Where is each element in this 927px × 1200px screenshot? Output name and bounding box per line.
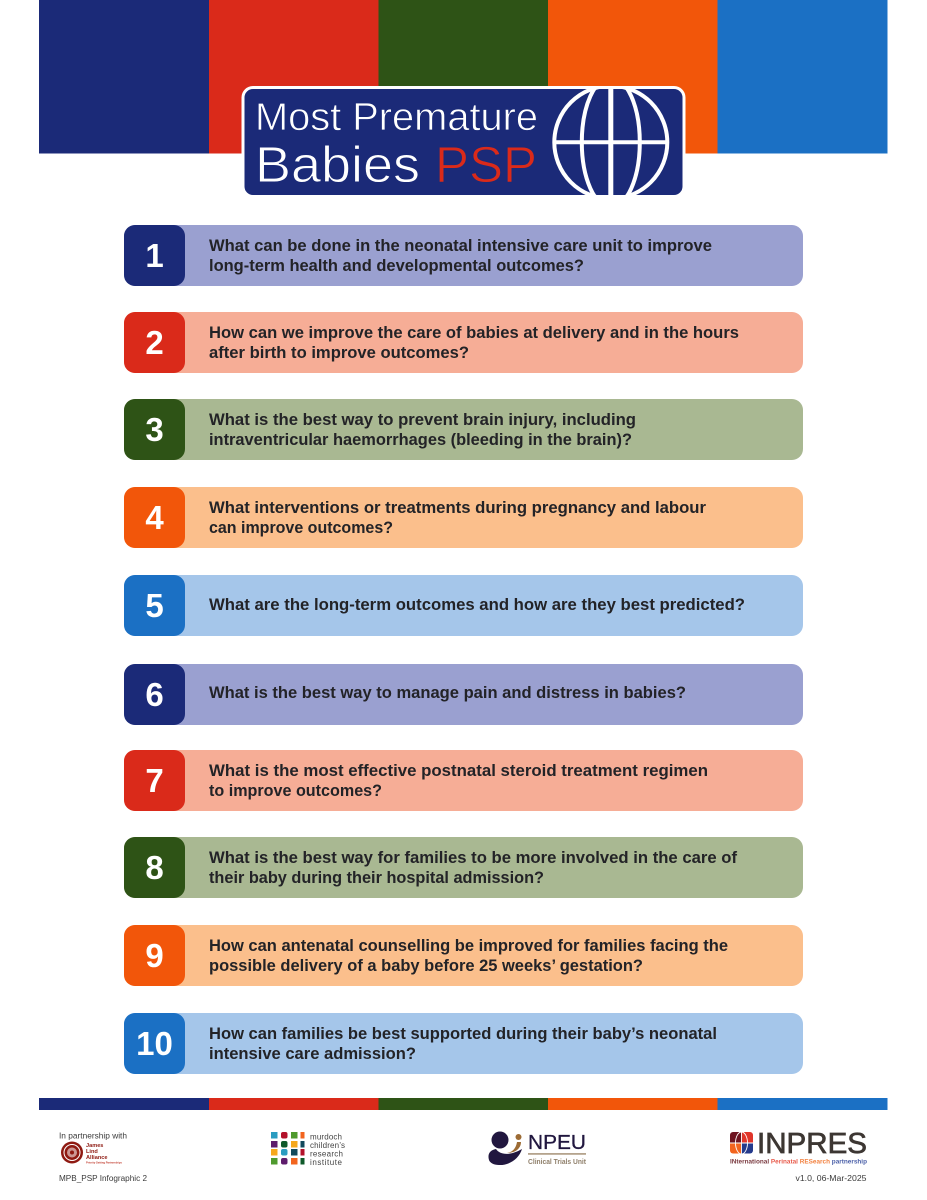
title: PSP: PSP xyxy=(435,136,537,193)
question 7: 7 xyxy=(145,762,164,799)
question 5: 5 xyxy=(145,587,164,624)
title panel xyxy=(242,86,686,195)
logo: James Lind Alliance: Alliance xyxy=(86,1155,107,1161)
logo: NPEU Clinical Trials Unit: Clinical Trials Unit xyxy=(528,1159,587,1166)
logo: James Lind Alliance: Priority Setting Partnerships xyxy=(86,1160,122,1164)
question 3 xyxy=(124,399,803,460)
question 2: after birth to improve outcomes? xyxy=(209,344,469,362)
question 4: What interventions or treatments during pregnancy and labour xyxy=(209,499,707,517)
question 7 xyxy=(124,750,803,811)
logo: NPEU Clinical Trials Unit: NPEU xyxy=(528,1132,586,1154)
question 2: 2 xyxy=(145,324,164,361)
question 8 xyxy=(124,837,803,898)
question 1: 1 xyxy=(145,237,164,274)
icon: globe xyxy=(552,89,670,195)
question 3: What is the best way to prevent brain injury, including xyxy=(209,411,636,429)
question 2: How can we improve the care of babies at delivery and in the hours xyxy=(209,324,739,342)
title: Most Premature: Most Premature xyxy=(255,96,538,139)
document reference: MPB_PSP Infographic 2 xyxy=(59,1173,147,1183)
logo: murdoch children's research institute: children’s xyxy=(310,1141,345,1150)
header colour bands xyxy=(39,0,888,154)
question 10 xyxy=(124,1013,803,1074)
question 3: intraventricular haemorrhages (bleeding in the brain)? xyxy=(209,431,632,449)
logo: murdoch children's research institute xyxy=(271,1132,345,1167)
logo: NPEU Clinical Trials Unit xyxy=(488,1132,587,1166)
partnership label: In partnership with xyxy=(59,1130,127,1140)
question 9 xyxy=(124,925,803,986)
question 10: How can families be best supported during their baby’s neonatal xyxy=(209,1025,717,1043)
question 7: to improve outcomes? xyxy=(209,782,382,800)
logo: INPRES xyxy=(730,1128,867,1166)
question 9: How can antenatal counselling be improved for families facing the xyxy=(209,937,728,955)
question 6 xyxy=(124,664,803,725)
question 3: 3 xyxy=(145,411,164,448)
question 9: possible delivery of a baby before 25 weeks’ gestation? xyxy=(209,957,643,975)
logo: murdoch children's research institute: research xyxy=(310,1150,343,1158)
question 8: What is the best way for families to be more involved in the care of xyxy=(209,849,738,867)
question 5 xyxy=(124,575,803,636)
question 6: 6 xyxy=(145,676,164,713)
question 4: can improve outcomes? xyxy=(209,519,393,537)
logo: INPRES: INPRES xyxy=(757,1128,867,1160)
logo: INPRES: INternational Perinatal RESearch partnership xyxy=(730,1158,867,1166)
logo: James Lind Alliance: Lind xyxy=(86,1149,98,1155)
question 2 xyxy=(124,312,803,373)
question 10: 10 xyxy=(136,1025,173,1062)
question 8: 8 xyxy=(145,849,164,886)
version and date: v1.0, 06-Mar-2025 xyxy=(796,1173,867,1183)
question 4 xyxy=(124,487,803,548)
title: Babies: Babies xyxy=(255,136,420,193)
question 1 xyxy=(124,225,803,286)
question 5: What are the long-term outcomes and how are they best predicted? xyxy=(209,596,745,614)
footer colour bar xyxy=(39,1098,888,1110)
question 9: 9 xyxy=(145,937,164,974)
question 10: intensive care admission? xyxy=(209,1045,416,1063)
question 1: long-term health and developmental outcomes? xyxy=(209,257,584,275)
logo: James Lind Alliance xyxy=(61,1142,122,1164)
question 4: 4 xyxy=(145,499,164,536)
logo: murdoch children's research institute: murdoch xyxy=(310,1132,342,1142)
question 8: their baby during their hospital admission? xyxy=(209,869,544,887)
question 1: What can be done in the neonatal intensive care unit to improve xyxy=(209,237,712,255)
logo: murdoch children's research institute: institute xyxy=(310,1158,343,1167)
question 7: What is the most effective postnatal steroid treatment regimen xyxy=(209,762,708,780)
logo: James Lind Alliance: James xyxy=(86,1143,103,1149)
question 6: What is the best way to manage pain and distress in babies? xyxy=(209,684,686,702)
